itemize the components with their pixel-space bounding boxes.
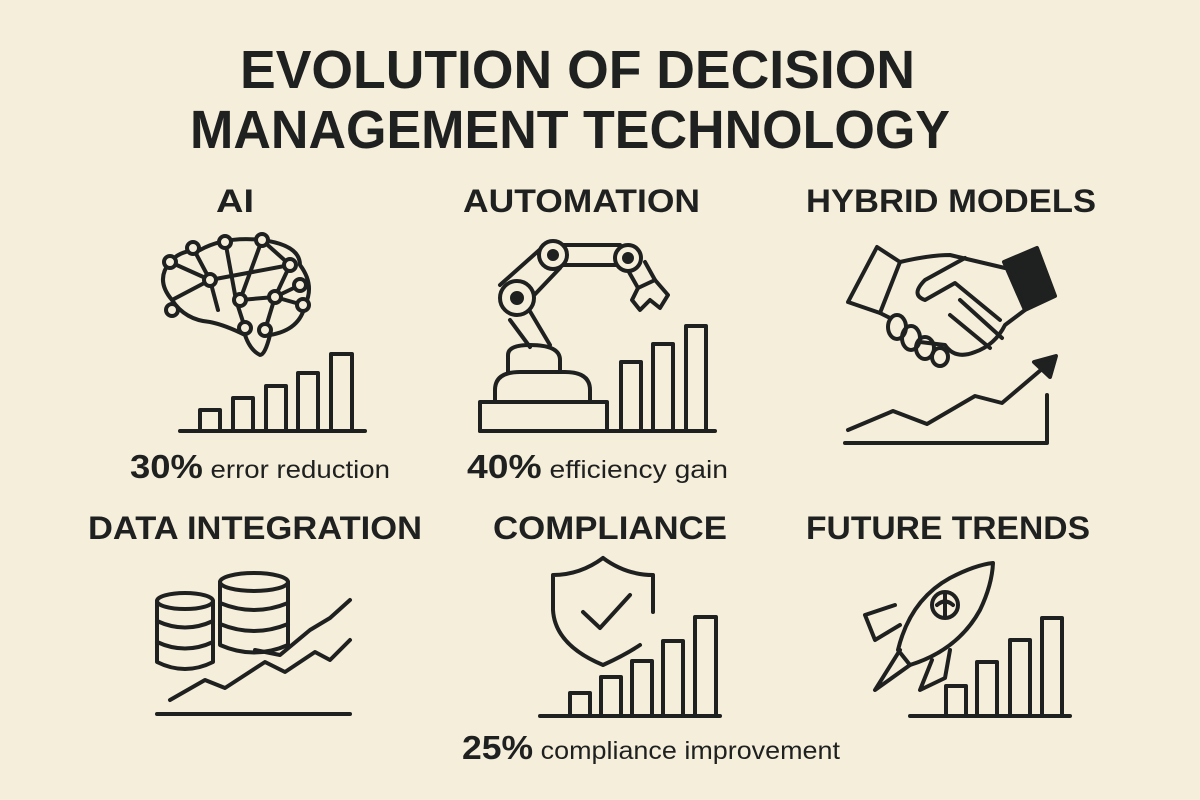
icon: database cylinders: [157, 573, 288, 669]
chart: AI bars: [180, 354, 365, 431]
chart: data zigzag: [157, 600, 350, 714]
stat: automation: 40% efficiency gain: [467, 448, 728, 485]
icon: handshake: [848, 247, 1055, 366]
stat: AI: 30% error reduction: [130, 448, 390, 485]
icon: shield: [553, 558, 653, 665]
icon: brain network: [163, 234, 309, 355]
heading: hybrid models: HYBRID MODELS: [806, 183, 1096, 219]
heading: AI: AI: [216, 183, 254, 219]
icon: rocket: [865, 563, 993, 690]
icon: robot arm: [480, 241, 668, 431]
heading: automation: AUTOMATION: [463, 183, 700, 219]
heading: data integration: DATA INTEGRATION: [88, 510, 422, 546]
title: [190, 40, 950, 160]
chart: automation bars: [480, 326, 715, 431]
chart: hybrid trend line: [845, 356, 1056, 443]
chart: compliance bars: [540, 617, 720, 716]
chart: future bars: [910, 618, 1070, 716]
stat: compliance: 25% compliance improvement: [462, 729, 840, 766]
heading: compliance: COMPLIANCE: [493, 510, 727, 546]
title: MANAGEMENT TECHNOLOGY: [190, 100, 950, 160]
heading: future trends: FUTURE TRENDS: [806, 510, 1090, 546]
title: EVOLUTION OF DECISION: [240, 40, 915, 100]
